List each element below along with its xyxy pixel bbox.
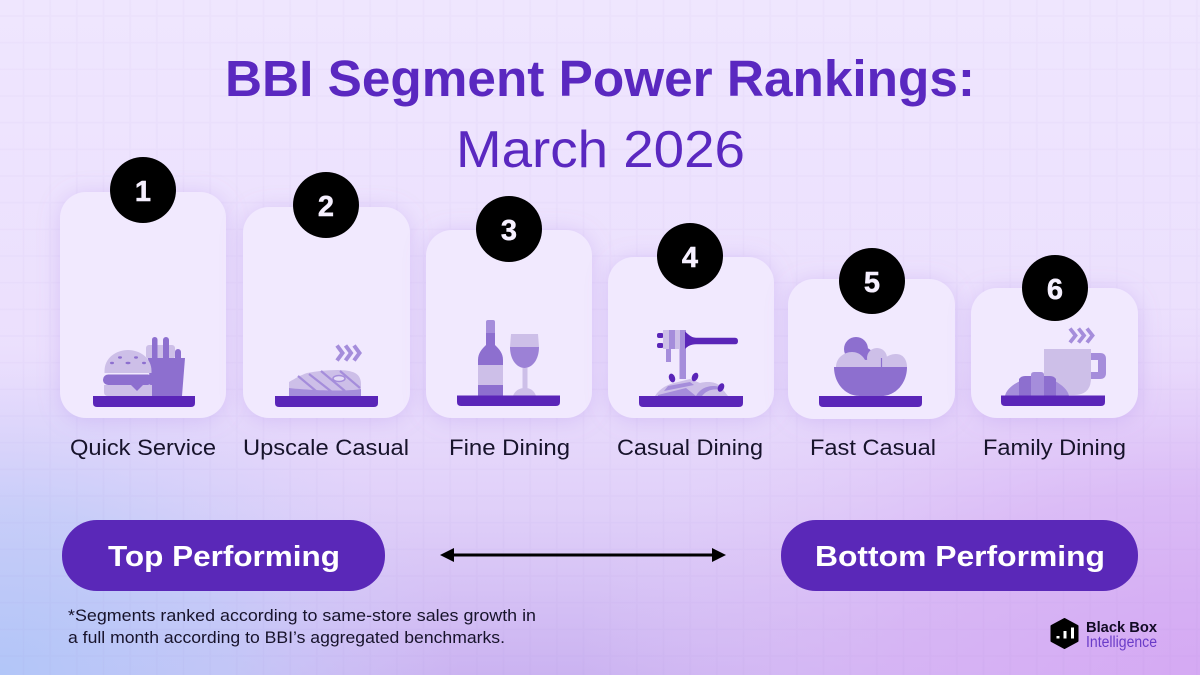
- panel: rank 5 fast casual: [788, 248, 955, 460]
- rank badge 1: [110, 157, 176, 223]
- logo: Black Box Intelligence: Black Box: [1086, 619, 1158, 636]
- footnote: a full month according to BBI’s aggregated benchmarks.: [68, 629, 505, 647]
- panel: rank 1 quick service: [60, 157, 226, 460]
- rank badge 5: [839, 248, 905, 314]
- icon: fork with pasta: [639, 330, 743, 407]
- rank badge 2: 2: [318, 191, 334, 223]
- rank badge 6: [1022, 255, 1088, 321]
- rank badge 5: 5: [864, 267, 880, 299]
- icon: wine bottle and glass: [457, 320, 560, 406]
- rank badge 2: [293, 172, 359, 238]
- pill: bottom performing: [781, 520, 1138, 591]
- label: upscale casual: Upscale Casual: [243, 435, 409, 460]
- pill: top performing: [62, 520, 385, 591]
- panel: rank 3 fine dining: [426, 196, 592, 460]
- pill: top performing: Top Performing: [108, 541, 340, 573]
- title: [225, 50, 975, 179]
- label: fast casual: Fast Casual: [810, 435, 936, 460]
- label: family dining: Family Dining: [983, 435, 1126, 460]
- logo: Black Box Intelligence: [1052, 619, 1158, 651]
- panel: rank 2 upscale casual: [243, 172, 410, 460]
- arrow: performance direction: [440, 548, 726, 562]
- icon: coffee and croissant: [1001, 328, 1106, 406]
- title: BBI Segment Power Rankings:: [225, 50, 975, 107]
- icon: steak: [275, 346, 378, 407]
- footnote: [68, 607, 536, 647]
- icon: salad bowl: [819, 337, 922, 407]
- logo: Black Box Intelligence: Intelligence: [1086, 634, 1157, 651]
- label: fine dining: Fine Dining: [449, 435, 570, 460]
- rank badge 3: [476, 196, 542, 262]
- icon: burger and fries: [93, 337, 195, 407]
- footnote: *Segments ranked according to same-store sales growth in: [68, 607, 536, 625]
- rank badge 3: 3: [501, 215, 517, 247]
- rank badge 1: 1: [135, 176, 151, 208]
- pill: bottom performing: Bottom Performing: [815, 541, 1105, 573]
- rank badge 6: 6: [1047, 274, 1063, 306]
- title: March 2026: [456, 121, 745, 179]
- panel: rank 4 casual dining: [608, 223, 774, 460]
- label: quick service: Quick Service: [70, 435, 216, 460]
- rank badge 4: [657, 223, 723, 289]
- label: casual dining: Casual Dining: [617, 435, 763, 460]
- rank badge 4: 4: [682, 242, 698, 274]
- panel: rank 6 family dining: [971, 255, 1138, 460]
